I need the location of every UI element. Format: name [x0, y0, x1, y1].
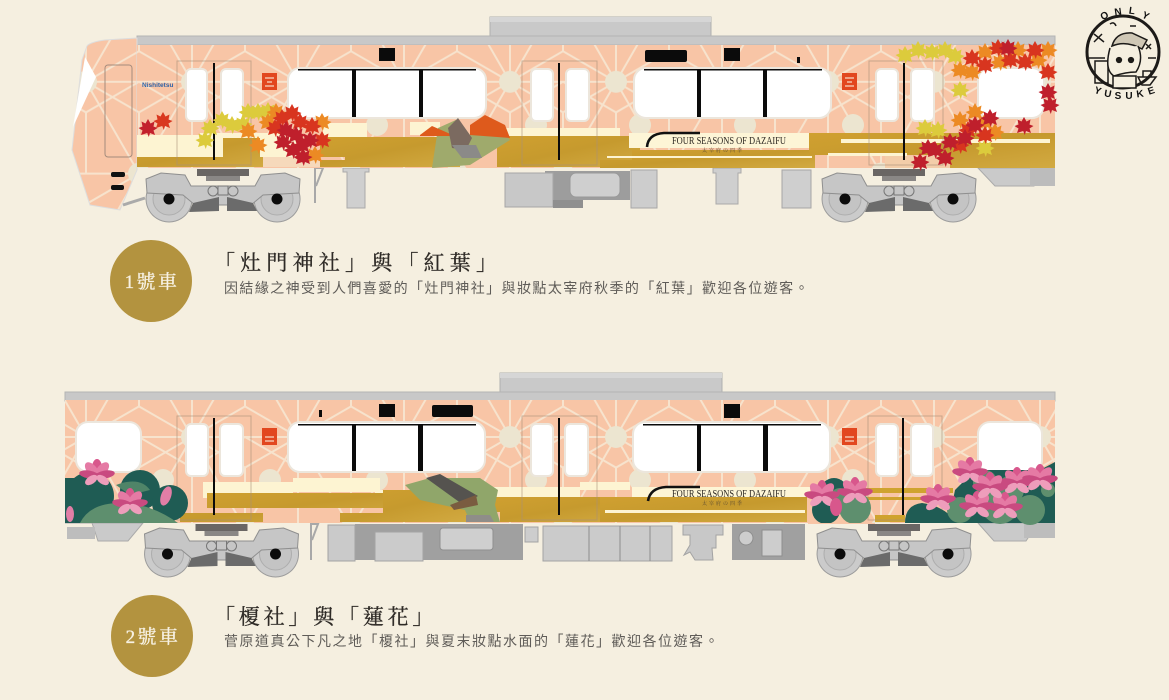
shrine illustration	[420, 115, 510, 168]
lower star blobs	[152, 469, 864, 491]
four seasons logo: FOUR SEASONS OF DAZAIFU	[672, 488, 786, 500]
car 2 heading: 「榎社」與「蓮花」	[214, 605, 437, 629]
stamp bottom text: S	[1115, 91, 1122, 102]
undercarriage equipment	[315, 168, 1055, 208]
cab front	[72, 38, 145, 210]
side windows	[186, 68, 1044, 121]
gold and cream clouds	[137, 122, 1055, 168]
stamp top text: O	[1099, 10, 1111, 23]
four seasons logo: 太宰府の四季	[702, 147, 744, 154]
car 2 badge: 2號車	[126, 626, 180, 648]
car 2 description: 菅原道真公下凡之地「榎社」與夏末妝點水面的「蓮花」歡迎各位遊客。	[224, 633, 720, 649]
author stamp logo	[1087, 6, 1159, 102]
car 1 badge: 1號車	[125, 271, 179, 293]
door frames	[177, 416, 942, 520]
stamp top text	[1099, 6, 1151, 23]
side windows	[76, 422, 1042, 476]
lower star blobs	[366, 114, 864, 136]
train car 1	[72, 17, 1060, 222]
stamp top text: N	[1114, 7, 1122, 18]
gold and cream clouds	[180, 478, 953, 522]
train car 2	[65, 373, 1058, 577]
lotus middle	[804, 477, 875, 524]
bogie rear	[822, 169, 976, 222]
stamp bottom text: K	[1136, 88, 1145, 100]
red emblems	[262, 73, 857, 90]
roof unit	[490, 17, 711, 41]
stamp bottom text: Y	[1093, 85, 1103, 98]
stamp bottom text: E	[1147, 85, 1157, 98]
bogie front	[144, 524, 299, 577]
four seasons logo	[647, 133, 786, 154]
operator logo: Nishitetsu	[142, 82, 173, 89]
shrine illustration	[405, 474, 500, 522]
stamp bottom text: U	[1103, 88, 1112, 101]
maple leaves right	[896, 39, 1060, 171]
stamp bottom text	[1093, 85, 1157, 102]
stamp top text: Y	[1140, 10, 1151, 23]
car 1 badge	[110, 240, 192, 322]
black window and door details	[213, 48, 905, 160]
car body	[65, 400, 1055, 523]
roof strip	[65, 392, 1055, 401]
bogie rear	[817, 524, 971, 577]
roof strip	[137, 36, 1055, 45]
bogie front	[146, 169, 300, 222]
car body	[137, 45, 1055, 168]
lotus left	[65, 459, 188, 523]
car 1 heading: 「灶門神社」與「紅葉」	[214, 251, 502, 275]
lotus right	[905, 457, 1058, 525]
undercarriage equipment	[65, 523, 1055, 561]
stamp bottom text: U	[1125, 91, 1133, 102]
stamp character	[1089, 23, 1156, 88]
four seasons logo: FOUR SEASONS OF DAZAIFU	[672, 135, 786, 147]
car 1 description: 因結緣之神受到人們喜愛的「灶門神社」與妝點太宰府秋季的「紅葉」歡迎各位遊客。	[224, 280, 810, 296]
maple leaves left	[138, 102, 332, 166]
stamp top text: L	[1128, 6, 1136, 17]
four seasons logo: 太宰府の四季	[702, 500, 744, 507]
roof unit	[500, 373, 722, 397]
door frames	[177, 61, 943, 165]
four seasons logo	[648, 487, 786, 507]
red emblems	[262, 428, 857, 445]
black window and door details	[213, 404, 904, 515]
car 2 badge	[111, 595, 193, 677]
